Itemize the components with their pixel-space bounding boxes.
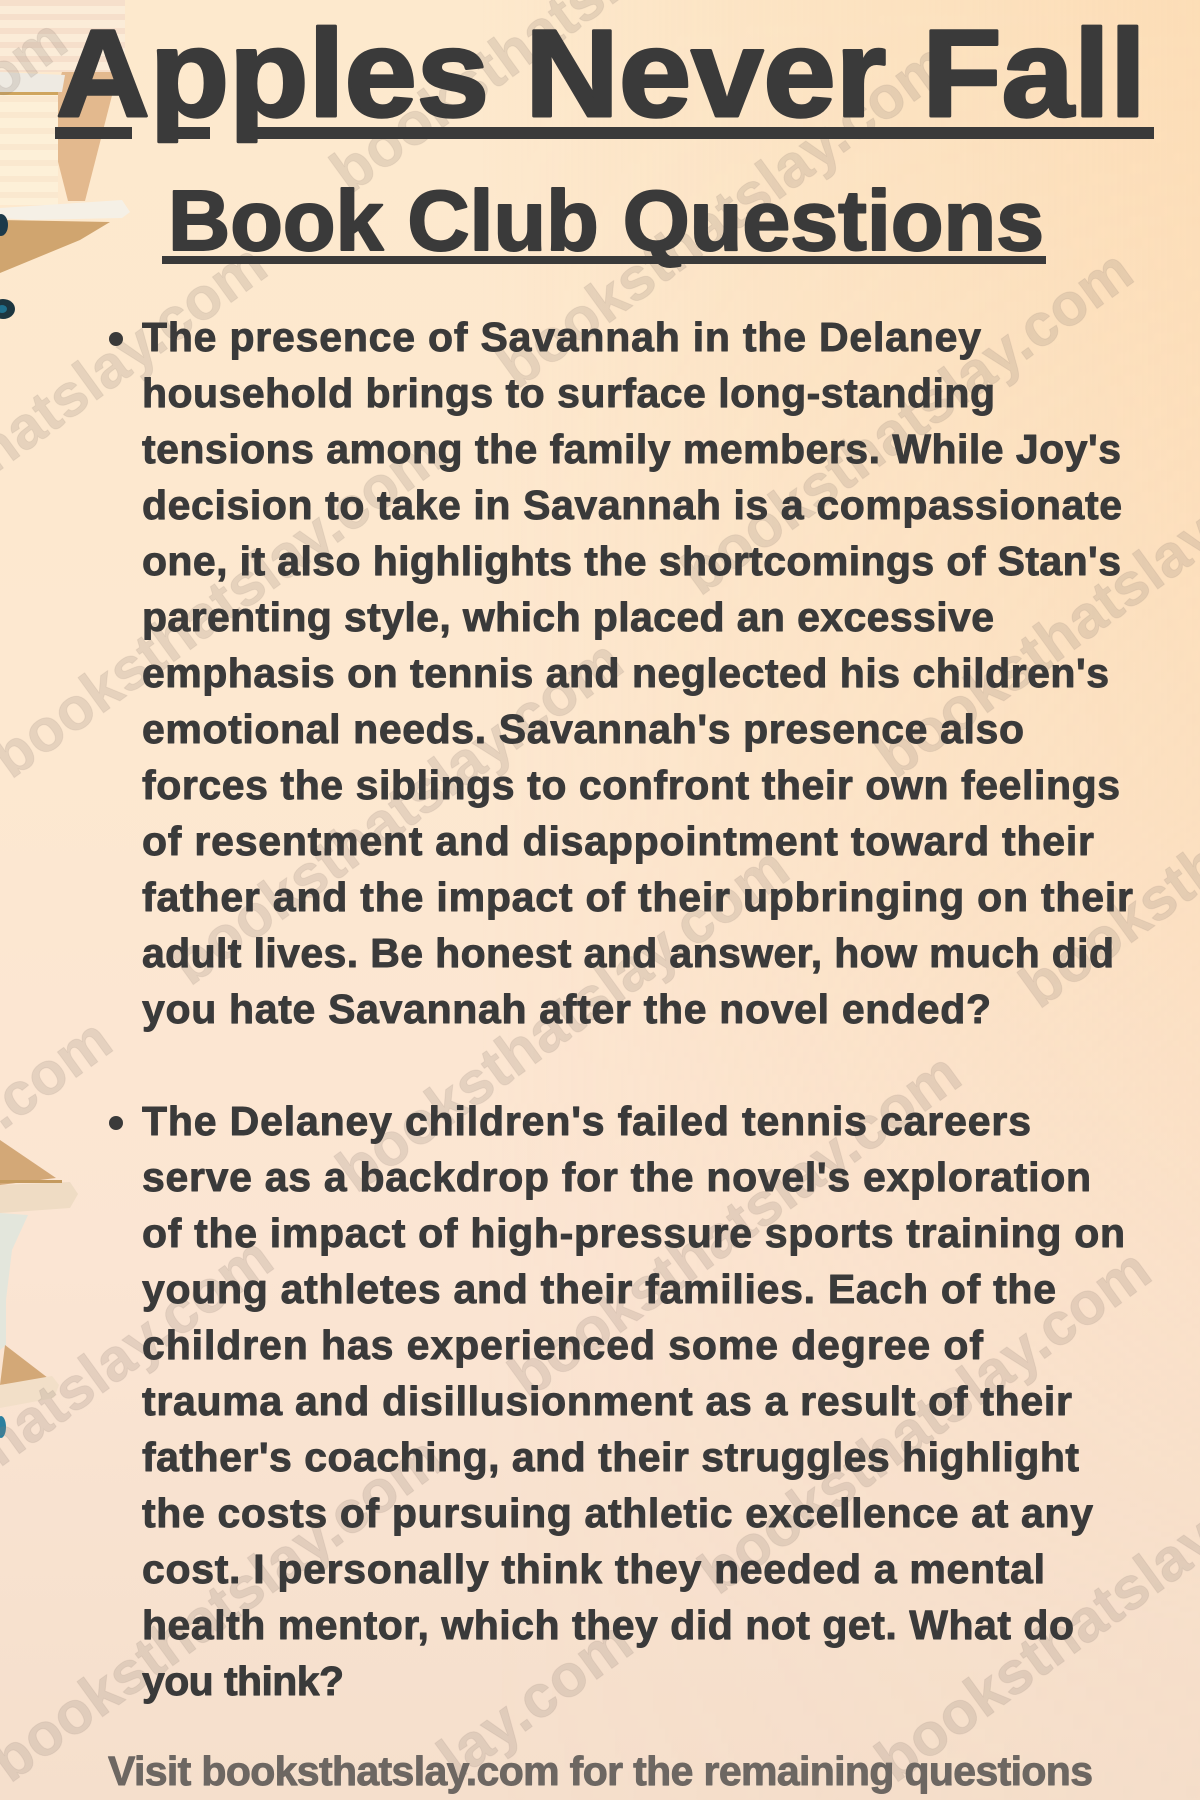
question 1 text: tensions among the family members. While Joy's — [142, 426, 1121, 472]
watermarks: booksthatslay.com — [496, 1039, 973, 1411]
watermarks: booksthatslay.com — [324, 833, 801, 1205]
question 2 text: father's coaching, and their struggles highlight — [142, 1434, 1079, 1480]
watermarks: booksthatslay.com — [686, 1235, 1163, 1607]
question 1 text: forces the siblings to confront their own feelings — [142, 762, 1120, 808]
bullet 1 — [109, 332, 123, 346]
book stack illustration: bottom left — [0, 1140, 78, 1438]
question 1 text: emphasis on tennis and neglected his children's — [142, 650, 1109, 696]
watermarks: lay.com — [425, 1607, 644, 1792]
question 1 text: decision to take in Savannah is a compassionate — [142, 482, 1122, 528]
question 1 text: parenting style, which placed an excessive — [142, 594, 994, 640]
question 2 text: of the impact of high-pressure sports training on — [142, 1210, 1125, 1256]
question 2 text: the costs of pursuing athletic excellence at any — [142, 1490, 1093, 1536]
watermarks: booksthatslay.com — [158, 626, 635, 998]
question 1 text: one, it also highlights the shortcomings of Stan's — [142, 538, 1121, 584]
bullet 2 — [109, 1116, 123, 1130]
question 1 text: father and the impact of their upbringing on their — [142, 874, 1133, 920]
question 2 — [109, 1098, 1125, 1704]
question 2 text: young athletes and their families. Each of the — [142, 1266, 1056, 1312]
question 1 — [109, 314, 1133, 1032]
question 1 text: you hate Savannah after the novel ended? — [142, 986, 991, 1032]
watermarks: booksthatslay.com — [485, 29, 962, 401]
question 2 text — [142, 1098, 1125, 1704]
subtitle: Book Club Questions — [168, 174, 1044, 269]
book stack illustration: top left — [0, 0, 130, 319]
question 1 text: The presence of Savannah in the Delaney — [142, 314, 981, 360]
watermarks: booksthatslay.com — [668, 236, 1145, 608]
question 2 text: trauma and disillusionment as a result of their — [142, 1378, 1072, 1424]
question 2 text: serve as a backdrop for the novel's exploration — [142, 1154, 1091, 1200]
title: Apples Never Fall — [56, 5, 1146, 143]
question 2 text: you think? — [142, 1658, 344, 1704]
question 2 text: health mentor, which they did not get. What do — [142, 1602, 1074, 1648]
question 2 text: cost. I personally think they needed a mental — [142, 1546, 1045, 1592]
footer call to action: Visit booksthatslay.com for the remaining questions — [108, 1748, 1093, 1794]
question 1 text: household brings to surface long-standing — [142, 370, 995, 416]
question 1 text: adult lives. Be honest and answer, how much did — [142, 930, 1114, 976]
question 2 text: children has experienced some degree of — [142, 1322, 983, 1368]
question 1 text: of resentment and disappointment toward their — [142, 818, 1094, 864]
question 1 text — [142, 314, 1133, 1032]
question 1 text: emotional needs. Savannah's presence also — [142, 706, 1024, 752]
question 2 text: The Delaney children's failed tennis careers — [142, 1098, 1031, 1144]
